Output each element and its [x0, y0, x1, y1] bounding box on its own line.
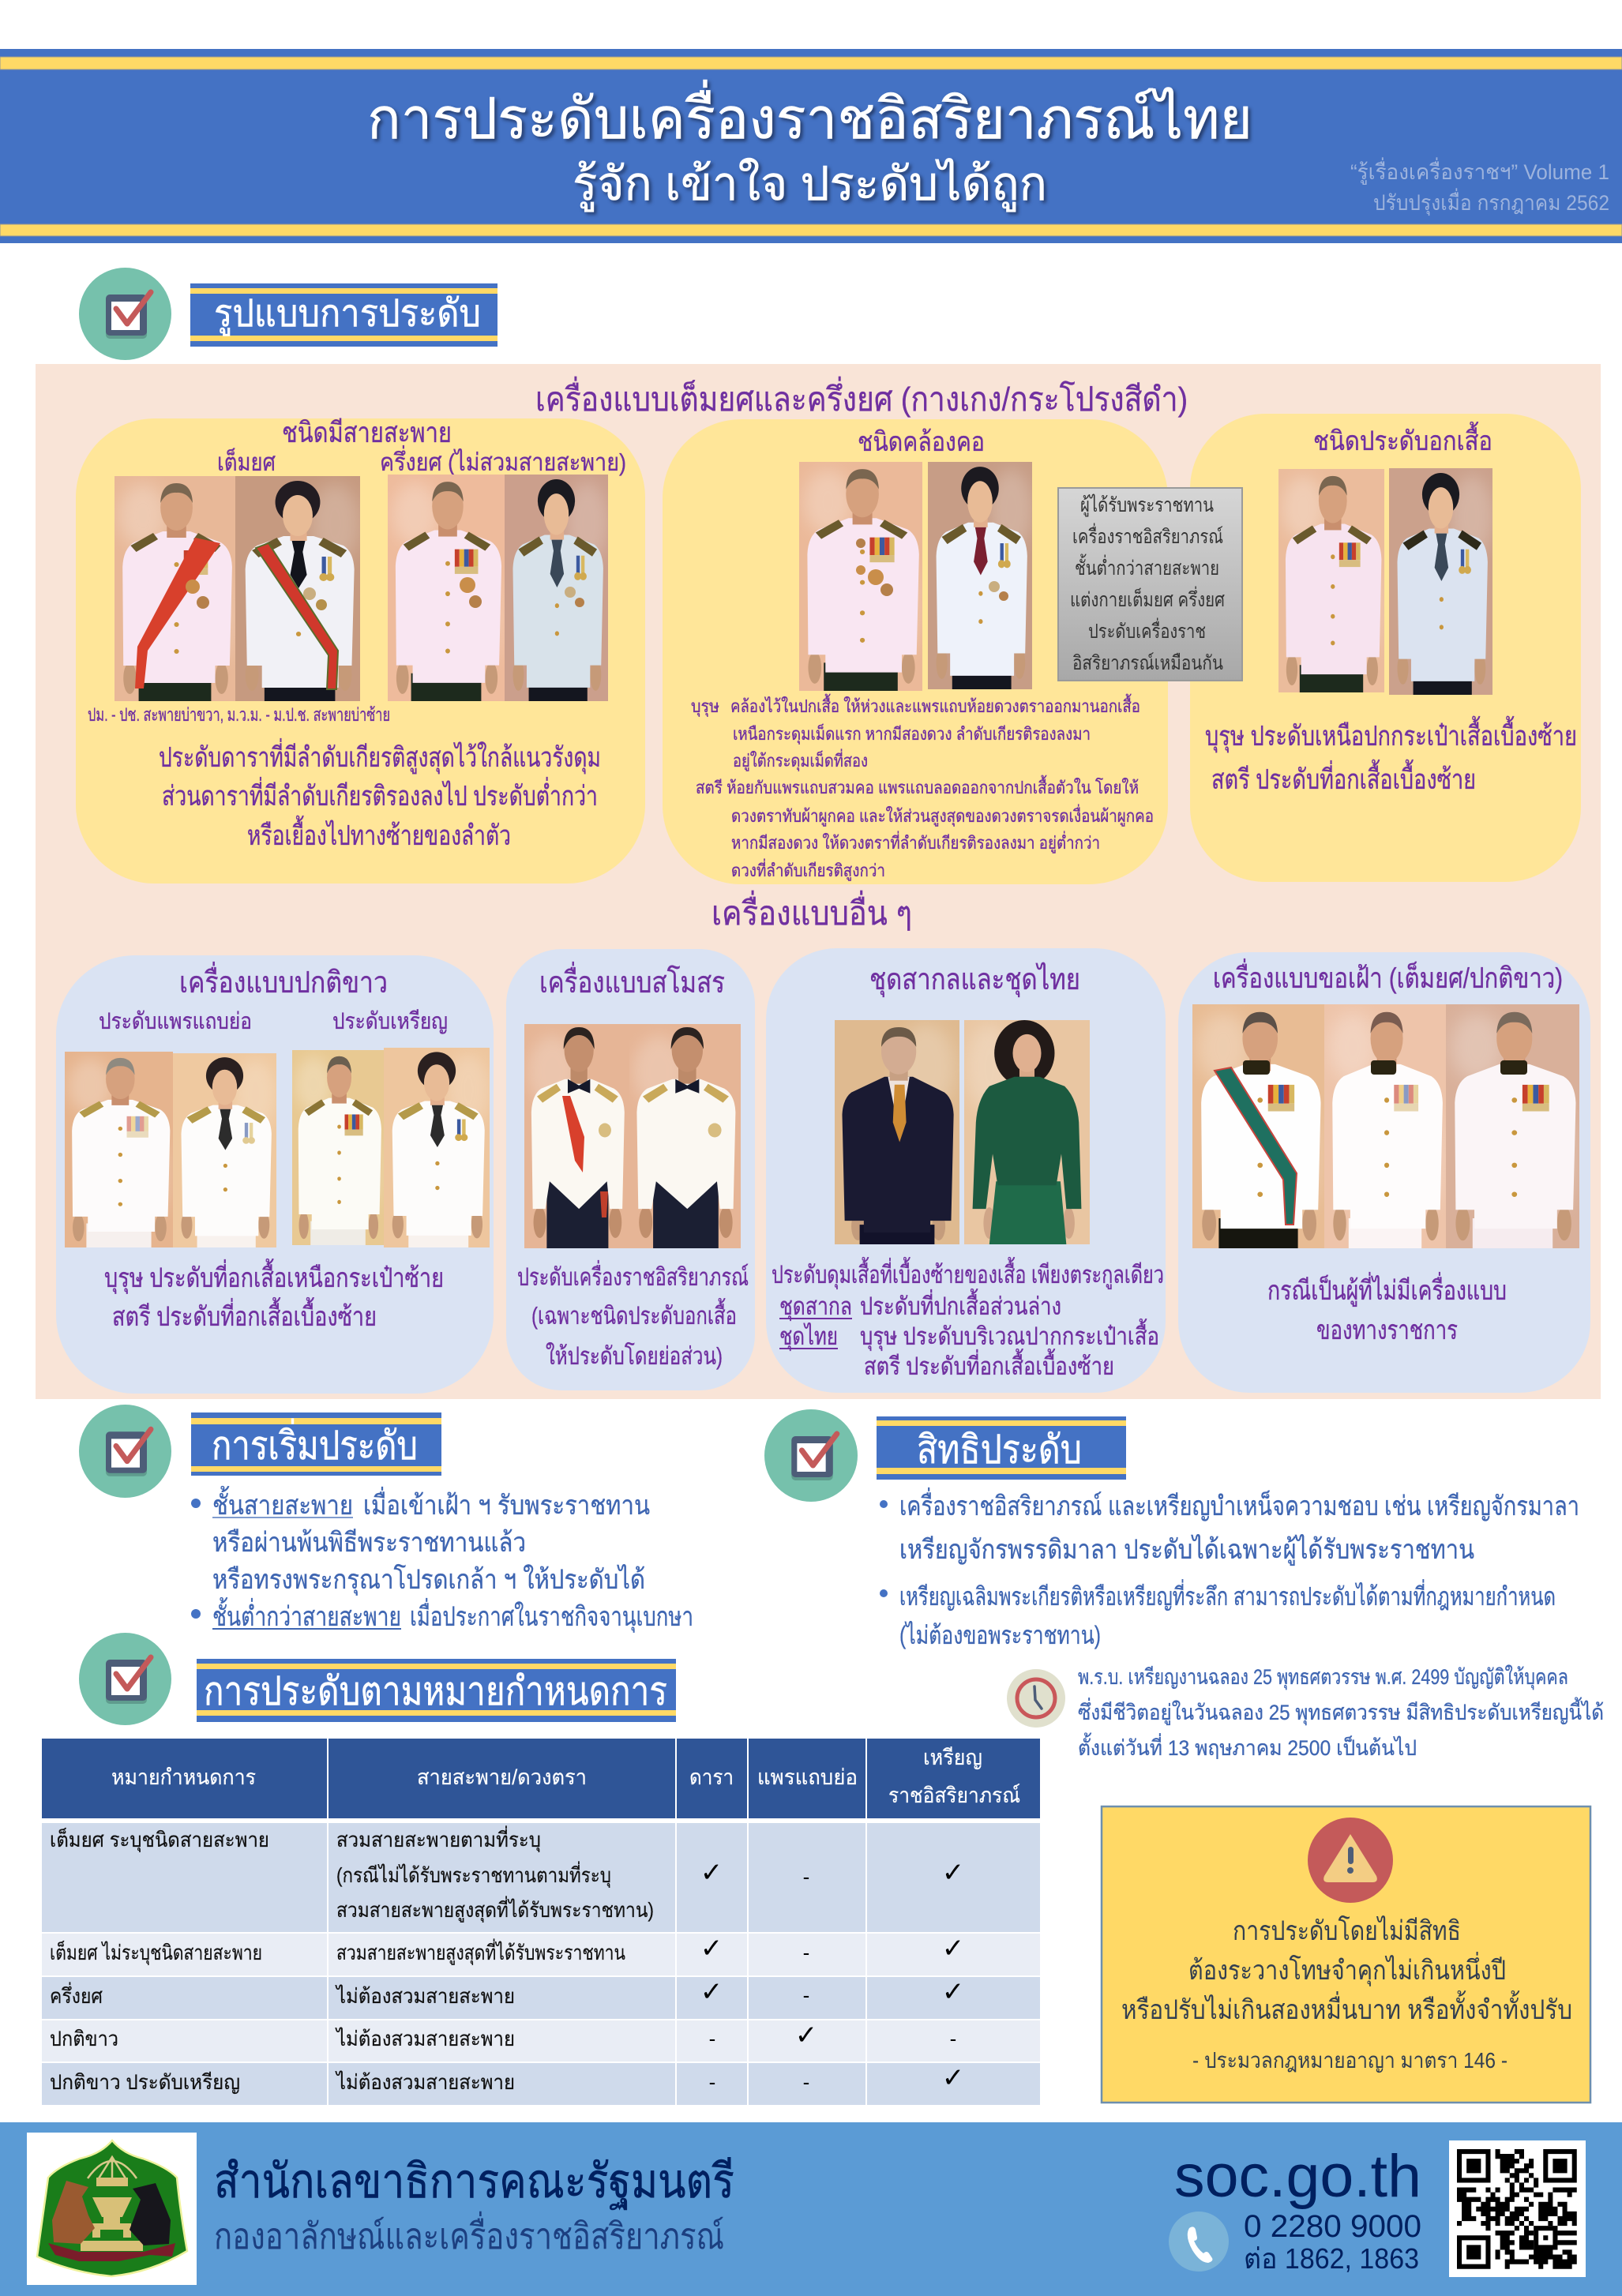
panel: mess uniform: ประดับเครื่องราชอิสริยาภรณ์ — [517, 1260, 749, 1291]
photos: sash uniforms — [115, 475, 608, 701]
text: start wearing rules: เมื่อประกาศในราชกิจจานุเบกษา — [410, 1598, 693, 1633]
table header: แพรแถบย่อ — [757, 1765, 858, 1789]
table row 3: ✓ — [942, 1976, 964, 2008]
panel: suit and Thai dress: สตรี ประดับที่อกเสื้อเบื้องซ้าย — [864, 1349, 1114, 1380]
panel: normal white uniform — [56, 955, 494, 1394]
text: right to wear rules: เหรียญจักรพรรดิมาลา ประดับได้เฉพาะผู้ได้รับพระราชทาน — [899, 1534, 1474, 1566]
panel: suit and Thai dress: ชุดไทย — [779, 1322, 838, 1352]
panel: suit and Thai dress: ประดับดุมเสื้อที่เบื้องซ้ายของเสื้อ เพียงตระกูลเดียว — [772, 1257, 1164, 1290]
panel: breast type: สตรี ประดับที่อกเสื้อเบื้องซ้าย — [1211, 759, 1476, 795]
table row 1: - — [803, 1865, 809, 1889]
panel: suit and Thai dress — [766, 948, 1166, 1393]
panel: suit and Thai dress: ชุดสากลและชุดไทย — [869, 962, 1080, 997]
panel: sash type: เต็มยศ — [217, 448, 276, 476]
heading: right to wear: สิทธิประดับ — [917, 1427, 1082, 1472]
panel: mess uniform: เครื่องแบบสโมสร — [539, 962, 725, 1000]
panel: neck type — [663, 419, 1168, 884]
table row 4: - — [709, 2027, 715, 2050]
table row 3: ไม่ต้องสวมสายสะพาย — [335, 1984, 515, 2008]
callout: grey note: ผู้ได้รับพระราชทาน — [1080, 493, 1214, 517]
panel: normal white uniform: ประดับเหรียญ — [332, 1009, 448, 1034]
panel: sash type: ส่วนดาราที่มีลำดับเกียรติรองลงไป ประดับต่ำกว่า — [162, 777, 598, 812]
table row 3: - — [803, 1983, 809, 2007]
photos: suit and Thai dress — [835, 1020, 1090, 1244]
footer phone numbers: 0 2280 9000 — [1244, 2209, 1421, 2244]
callout: penalty warning: ต้องระวางโทษจำคุกไม่เกินหนึ่งปี — [1188, 1952, 1506, 1986]
table row 4 — [50, 2020, 956, 2051]
panel: audience uniform: ของทางราชการ — [1316, 1315, 1458, 1345]
panel: sash type: ชนิดมีสายสะพาย — [282, 416, 452, 448]
table row 1: สวมสายสะพายตามที่ระบุ — [336, 1825, 541, 1852]
callout: grey note: ประดับเครื่องราช — [1088, 617, 1206, 643]
volume note: “รู้เรื่องเครื่องราชฯ” Volume 1 — [1350, 157, 1609, 185]
text: start wearing rules — [191, 1486, 693, 1633]
panel: normal white uniform: เครื่องแบบปกติขาว — [179, 962, 388, 1000]
panel: audience uniform — [1178, 952, 1590, 1393]
callout: penalty warning: - ประมวลกฎหมายอาญา มาตรา 146 - — [1192, 2048, 1507, 2073]
icon: section check 4 — [79, 1633, 171, 1725]
table row 2: ✓ — [942, 1933, 964, 1964]
heading: full dress: เครื่องแบบเต็มยศและครึ่งยศ (กางเกง/กระโปรงสีดำ) — [535, 377, 1188, 418]
panel: peach background — [36, 364, 1601, 1399]
table row 4: ปกติขาว — [50, 2027, 118, 2050]
photos: audience uniforms — [1192, 1004, 1579, 1248]
table row 1: ✓ — [700, 1857, 723, 1889]
text: neck order rules: บุรุษ — [691, 696, 719, 717]
table row 3: ✓ — [700, 1976, 723, 2008]
text: right to wear rules: (ไม่ต้องขอพระราชทาน) — [899, 1621, 1101, 1649]
panel: suit and Thai dress: ชุดสากล — [779, 1292, 852, 1322]
panel: breast type: ชนิดประดับอกเสื้อ — [1313, 422, 1492, 456]
heading: start wearing: การเริ่มประดับ — [212, 1419, 418, 1468]
table row 3: ครึ่งยศ — [50, 1982, 103, 2008]
table row 4: ✓ — [795, 2020, 817, 2051]
QR code — [1449, 2140, 1586, 2277]
callout: grey note: อิสริยาภรณ์เหมือนกัน — [1072, 652, 1223, 674]
icon: warning — [1308, 1818, 1393, 1903]
footer organisation name — [214, 2155, 734, 2257]
icon: section check 3 — [764, 1409, 858, 1502]
footer organisation name: สำนักเลขาธิการคณะรัฐมนตรี — [214, 2155, 734, 2210]
panel: sash type — [76, 416, 645, 884]
table row 5: - — [803, 2070, 809, 2094]
text: neck order rules: สตรี ห้อยกับแพรแถบสวมคอ แพรแถบลอดออกจากปกเสื้อตัวใน โดยให้ — [696, 775, 1139, 797]
panel: sash type: ครึ่งยศ (ไม่สวมสายสะพาย) — [380, 445, 626, 476]
panel: normal white uniform: บุรุษ ประดับที่อกเสื้อเหนือกระเป๋าซ้าย — [104, 1259, 444, 1294]
table header: เหรียญ — [923, 1746, 982, 1769]
text: start wearing rules: เมื่อเข้าเฝ้า ฯ รับพระราชทาน — [363, 1487, 650, 1521]
table header: สายสะพาย/ดวงตรา — [417, 1765, 587, 1789]
heading: format of wearing: รูปแบบการประดับ — [214, 293, 481, 336]
icon: phone — [1169, 2212, 1229, 2272]
title: การประดับเครื่องราชอิสริยาภรณ์ไทย — [367, 80, 1252, 151]
panel: mess uniform: (เฉพาะชนิดประดับอกเสื้อ — [531, 1298, 737, 1330]
text: start wearing rules: หรือทรงพระกรุณาโปรดเกล้า ฯ ให้ประดับได้ — [212, 1564, 645, 1596]
table row 1: (กรณีไม่ได้รับพระราชทานตามที่ระบุ — [336, 1861, 611, 1888]
table row 5: ✓ — [942, 2062, 964, 2094]
text: neck order rules — [691, 694, 1154, 881]
text: start wearing rules: ชั้นต่ำกว่าสายสะพาย — [212, 1597, 401, 1632]
table row 5: ไม่ต้องสวมสายสะพาย — [335, 2070, 515, 2094]
footer band — [0, 2122, 1622, 2296]
table row 1 — [50, 1825, 964, 1923]
panel: sash type: ปม. - ปช. สะพายบ่าขวา, ม.ว.ม. - ม.ป.ช. สะพายบ่าซ้าย — [88, 704, 390, 725]
panel: suit and Thai dress: ประดับที่ปกเสื้อส่วนล่าง — [860, 1289, 1061, 1320]
table row 5: ปกติขาว ประดับเหรียญ — [50, 2070, 240, 2094]
table row 5: - — [709, 2070, 715, 2094]
callout: grey note — [1058, 488, 1242, 681]
text: commemorative medal note — [1078, 1664, 1604, 1760]
heading: start wearing — [191, 1412, 441, 1476]
table row 1: ✓ — [942, 1857, 964, 1889]
callout: grey note: เครื่องราชอิสริยาภรณ์ — [1072, 523, 1223, 548]
text: neck order rules: ดวงตราทับผ้าผูกคอ และให้ส่วนสูงสุดของดวงตราจรดเงื่อนผ้าผูกคอ — [731, 804, 1154, 827]
photos: breast uniforms — [1278, 468, 1492, 695]
table: wearing by schedule — [42, 1739, 1040, 2105]
callout: penalty warning — [1102, 1806, 1590, 2103]
table row 4: ไม่ต้องสวมสายสะพาย — [335, 2027, 515, 2050]
table row 2: ✓ — [700, 1933, 723, 1964]
volume note — [1350, 157, 1609, 216]
icon: section check 1 — [79, 268, 171, 360]
table row 3 — [50, 1976, 964, 2008]
text: neck order rules: ดวงที่ลำดับเกียรติสูงกว่า — [731, 858, 885, 881]
text: neck order rules: เหนือกระดุมเม็ดแรก หากมีสองดวง ลำดับเกียรติรองลงมา — [733, 722, 1091, 745]
table row 1: เต็มยศ ระบุชนิดสายสะพาย — [50, 1827, 269, 1852]
panel: sash type: ประดับดาราที่มีลำดับเกียรติสูงสุดไว้ใกล้แนวรังดุม — [159, 738, 601, 774]
panel: breast type — [1190, 414, 1581, 882]
panel: mess uniform — [506, 949, 755, 1390]
header banner — [0, 49, 1622, 243]
table row 1: สวมสายสะพายสูงสุดที่ได้รับพระราชทาน) — [336, 1896, 654, 1923]
panel: normal white uniform: ประดับแพรแถบย่อ — [99, 1009, 252, 1034]
table row 2: สวมสายสะพายสูงสุดที่ได้รับพระราชทาน — [336, 1938, 625, 1965]
text: commemorative medal note: ตั้งแต่วันที่ 13 พฤษภาคม 2500 เป็นต้นไป — [1078, 1732, 1417, 1760]
heading: other uniforms: เครื่องแบบอื่น ๆ — [712, 891, 912, 932]
text: neck order rules: อยู่ใต้กระดุมเม็ดที่สอง — [733, 748, 868, 771]
text: right to wear rules — [880, 1488, 1579, 1649]
table header: ดารา — [689, 1765, 734, 1789]
footer organisation name: กองอาลักษณ์และเครื่องราชอิสริยาภรณ์ — [214, 2211, 724, 2257]
panel: sash type: หรือเยื้องไปทางซ้ายของลำตัว — [247, 815, 511, 851]
heading: wearing by schedule: การประดับตามหมายกำหนดการ — [204, 1669, 667, 1713]
text: start wearing rules: หรือผ่านพ้นพิธีพระราชทานแล้ว — [212, 1528, 526, 1558]
table row 5 — [50, 2062, 964, 2094]
callout: grey note: แต่งกายเต็มยศ ครึ่งยศ — [1070, 586, 1225, 611]
text: neck order rules: หากมีสองดวง ให้ดวงตราที่ลำดับเกียรติรองลงมา อยู่ต่ำกว่า — [731, 831, 1100, 853]
footer phone numbers: ต่อ 1862, 1863 — [1244, 2242, 1419, 2275]
text: neck order rules: คล้องไว้ในปกเสื้อ ให้ห่วงและแพรแถบห้อยดวงตราออกมานอกเสื้อ — [730, 694, 1140, 716]
table header: ราชอิสริยาภรณ์ — [888, 1783, 1020, 1807]
footer website: soc.go.th — [1174, 2143, 1421, 2210]
callout: grey note: ชั้นต่ำกว่าสายสะพาย — [1075, 553, 1219, 580]
heading: format of wearing — [190, 283, 497, 347]
logo: cabinet secretariat emblem — [27, 2133, 197, 2285]
table row 2: - — [803, 1941, 809, 1964]
table row 2 — [50, 1933, 964, 1965]
heading: right to wear — [877, 1416, 1126, 1480]
panel: normal white uniform: สตรี ประดับที่อกเสื้อเบื้องซ้าย — [112, 1297, 377, 1332]
icon: clock — [1007, 1669, 1065, 1728]
footer phone numbers — [1244, 2209, 1421, 2275]
panel: neck type: ชนิดคล้องคอ — [858, 427, 985, 457]
text: start wearing rules: ชั้นสายสะพาย — [212, 1486, 353, 1521]
photos: mess uniforms — [524, 1024, 741, 1248]
panel: suit and Thai dress: บุรุษ ประดับบริเวณปากกระเป๋าเสื้อ — [860, 1319, 1159, 1352]
panel: mess uniform: ให้ประดับโดยย่อส่วน) — [546, 1342, 723, 1370]
title: รู้จัก เข้าใจ ประดับได้ถูก — [573, 157, 1047, 212]
photos: normal white uniforms — [65, 1048, 490, 1247]
table header — [111, 1746, 1020, 1807]
heading: wearing by schedule — [197, 1659, 676, 1722]
icon: section check 2 — [79, 1405, 171, 1498]
table header: หมายกำหนดการ — [111, 1765, 256, 1789]
title — [367, 80, 1252, 212]
table row 2: เต็มยศ ไม่ระบุชนิดสายสะพาย — [50, 1940, 262, 1965]
panel: audience uniform: กรณีเป็นผู้ที่ไม่มีเครื่องแบบ — [1267, 1272, 1507, 1307]
callout: penalty warning: การประดับโดยไม่มีสิทธิ — [1233, 1915, 1461, 1946]
table row 4: - — [950, 2027, 956, 2050]
photos: neck order uniforms — [799, 462, 1032, 691]
